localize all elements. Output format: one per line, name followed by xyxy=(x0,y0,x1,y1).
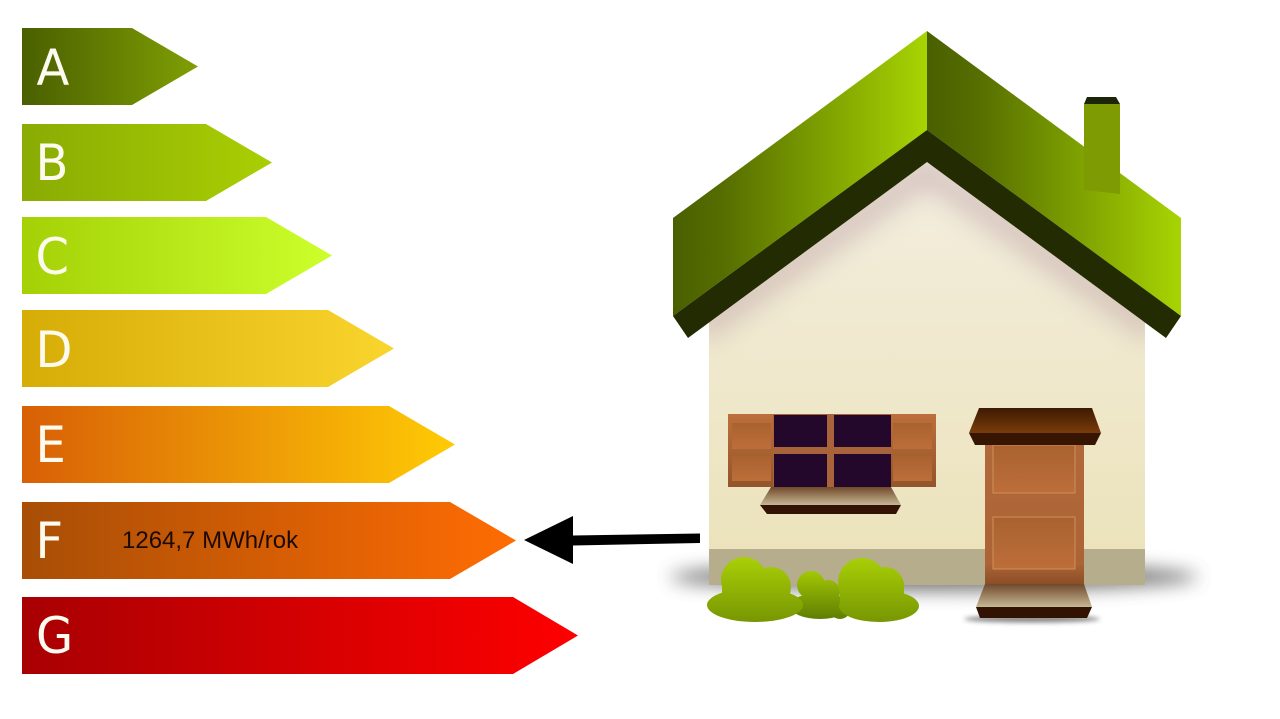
energy class A arrow: A xyxy=(36,39,70,97)
window with shutters xyxy=(728,414,936,514)
energy class E arrow: E xyxy=(36,416,66,474)
bush: left xyxy=(707,557,803,622)
energy class F arrow with consumption value: 1264,7 MWh/rok xyxy=(122,527,299,554)
energy class G arrow: G xyxy=(36,607,73,665)
chimney xyxy=(1084,97,1120,194)
energy class B arrow: B xyxy=(36,134,68,192)
ground shadow xyxy=(670,563,1198,591)
energy class D arrow: D xyxy=(36,321,72,379)
energy class F arrow with consumption value: F xyxy=(36,512,63,570)
bush: right xyxy=(838,558,919,622)
energy class G arrow xyxy=(22,597,578,674)
bush: middle xyxy=(790,571,851,619)
energy class E arrow xyxy=(22,406,455,483)
arrow pointing to class F xyxy=(524,516,700,564)
energy class A arrow xyxy=(22,28,198,105)
roof xyxy=(673,31,1181,338)
energy class C arrow: C xyxy=(36,228,69,286)
energy class F arrow with consumption value xyxy=(22,502,516,579)
energy class D arrow xyxy=(22,310,394,387)
bushes xyxy=(707,557,919,622)
energy class B arrow xyxy=(22,124,272,201)
energy class C arrow xyxy=(22,217,332,294)
door with awning and step xyxy=(964,408,1101,622)
house wall xyxy=(699,162,1155,585)
house illustration xyxy=(670,31,1198,622)
